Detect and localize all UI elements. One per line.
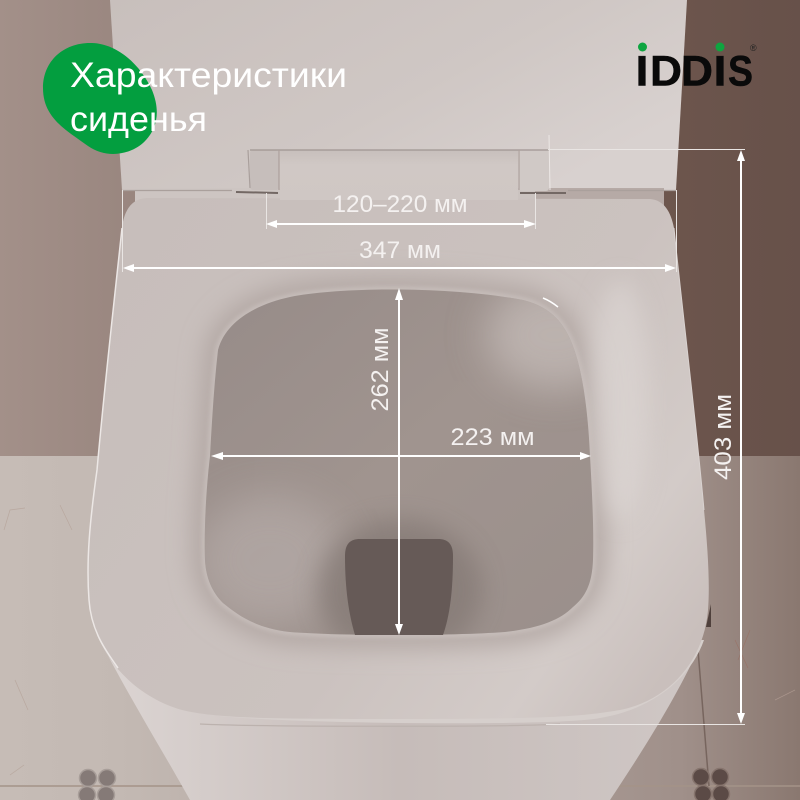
dimension: opening height 262 mm [367,288,403,635]
gloss highlight on seat [543,298,558,307]
dimension: opening height 262 mm: 262 мм [367,328,394,411]
title: сиденья [70,100,207,139]
hinge assembly [122,135,676,200]
dimension: seat width 347 mm: 347 мм [359,237,441,264]
dimension: opening width 223 mm [211,424,591,460]
seat rear strip under hinges [135,188,664,206]
green blob [43,43,157,154]
logo: IDDIS: S [728,48,753,96]
seat lower lip [96,625,704,723]
logo: IDDIS [636,42,757,96]
seat opening [204,290,594,635]
floor tile inlay: left dots [78,770,116,800]
dimension: hinge spacing 120-220 mm [266,191,536,229]
toilet bowl base [100,640,698,800]
drain outlet [345,539,453,635]
seat [88,198,709,719]
dimension: seat length 403 mm: 403 мм [710,394,737,480]
logo: IDDIS: D [681,48,713,96]
logo: IDDIS: D [650,48,682,96]
background: tiled floor [0,456,800,800]
dimension: opening width 223 mm: 223 мм [450,424,534,451]
dimension: hinge spacing 120-220 mm: 120–220 мм [332,191,468,218]
opening rim [205,289,593,635]
logo: IDDIS: I [714,48,726,96]
dimension: seat length 403 mm [546,150,745,724]
dimension: seat width 347 mm [122,190,676,272]
lid [110,0,687,190]
title: Характеристики [70,56,347,95]
logo: IDDIS: I [636,48,648,96]
background: wall [0,0,800,457]
title [70,56,347,139]
logo: IDDIS: ® [750,43,757,53]
floor tile inlay: right dots [692,604,730,800]
seat shading around the opening [205,280,650,635]
